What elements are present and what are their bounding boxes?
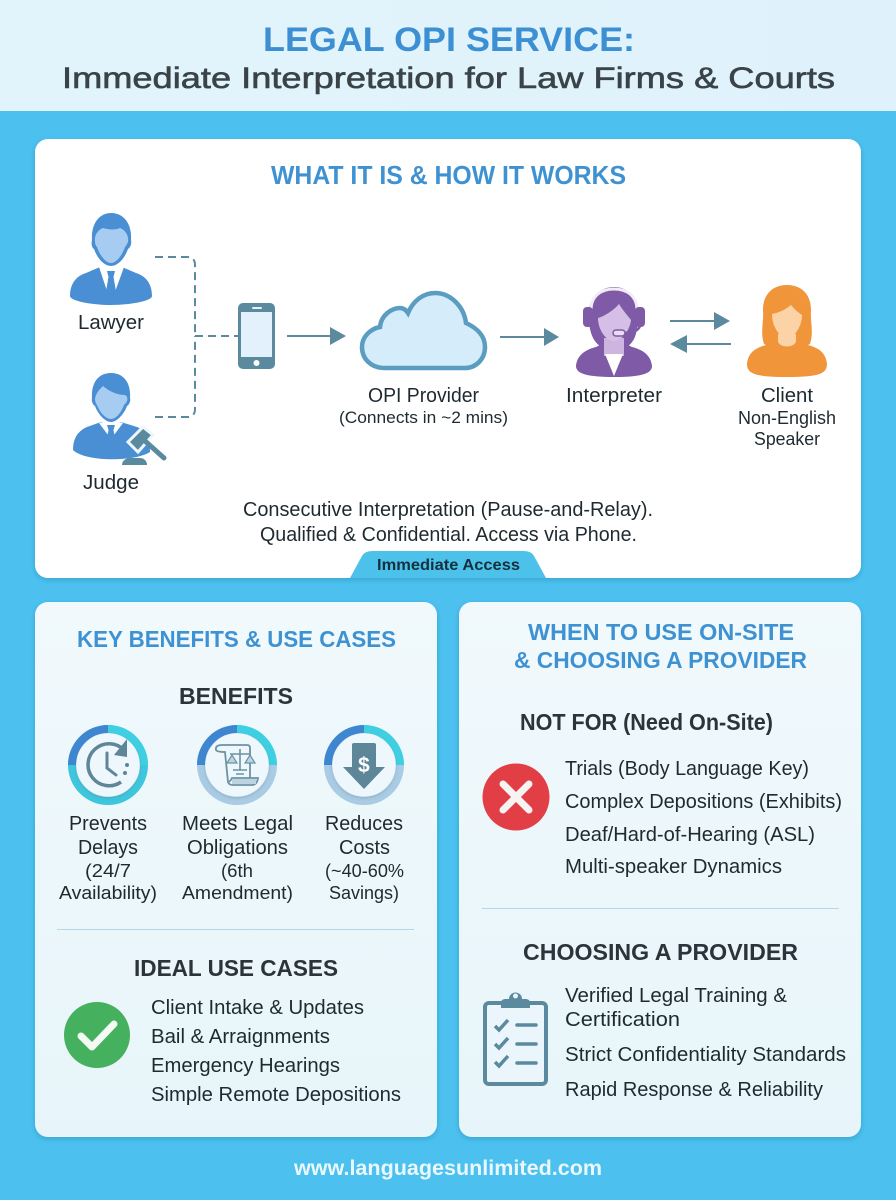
icon: cloud	[362, 293, 485, 368]
heading: what it is: WHAT IT IS & HOW IT WORKS	[271, 160, 626, 190]
label: interpreter: Interpreter	[566, 385, 662, 407]
icon: clipboard	[485, 992, 546, 1084]
text: reduces costs: (~40-60%	[325, 861, 404, 881]
text: meets legal obligations: Obligations	[187, 837, 288, 859]
panel: what it is and how it works	[35, 139, 861, 578]
icon: lawyer	[70, 213, 152, 305]
panel: when to use on-site and choosing a provider	[459, 602, 861, 1137]
icon: green check	[64, 1002, 130, 1068]
icon: cost reduction: $	[358, 754, 370, 777]
icon: judge with gavel	[73, 373, 164, 465]
text: description line 1: Consecutive Interpretation (Pause-and-Relay).	[243, 499, 653, 521]
header band	[0, 0, 896, 111]
list: ideal use cases: Simple Remote Depositions	[151, 1084, 401, 1106]
dashed connector	[155, 257, 238, 417]
subtitle: Immediate Interpretation for Law Firms & Courts	[62, 62, 835, 95]
icon: cost reduction	[328, 729, 400, 801]
subheading: ideal use cases: IDEAL USE CASES	[134, 955, 338, 981]
label: judge: Judge	[83, 472, 139, 494]
footer url: www.languagesunlimited.com	[293, 1157, 602, 1180]
list: choosing a provider	[565, 985, 846, 1101]
list: ideal use cases: Emergency Hearings	[151, 1055, 340, 1077]
label: client: Client	[761, 385, 813, 407]
text: prevents delays: Delays	[78, 837, 138, 859]
text: prevents delays: (24/7	[85, 861, 131, 881]
arrow: from client	[670, 335, 731, 353]
title: LEGAL OPI SERVICE:	[263, 21, 635, 59]
tab: immediate access: Immediate Access	[377, 557, 520, 574]
text: meets legal obligations: (6th	[221, 861, 253, 881]
icon: phone	[238, 303, 275, 369]
label: connects time: (Connects in ~2 mins)	[339, 408, 508, 427]
text: reduces costs: Reduces	[325, 813, 403, 835]
subheading: not for: NOT FOR (Need On-Site)	[520, 709, 773, 735]
arrow: phone to cloud	[287, 327, 346, 345]
label: OPI provider: OPI Provider	[368, 385, 479, 407]
heading: when to use on-site	[514, 619, 807, 673]
text: meets legal obligations: Amendment)	[182, 883, 293, 903]
text: meets legal obligations: Meets Legal	[182, 813, 293, 835]
icon: legal scroll	[201, 729, 273, 801]
label: non-english: Non-English	[738, 408, 836, 428]
label: speaker: Speaker	[754, 429, 820, 449]
icon: interpreter	[576, 287, 652, 377]
list: ideal use cases	[151, 997, 401, 1106]
text: description line 2: Qualified & Confidential. Access via Phone.	[260, 524, 637, 546]
icon: clock	[72, 729, 144, 801]
list: choosing a provider: Rapid Response & Reliability	[565, 1079, 823, 1101]
heading: when to use on-site: WHEN TO USE ON-SITE	[528, 619, 794, 645]
arrow: cloud to interpreter	[500, 328, 559, 346]
tab: immediate access	[350, 551, 546, 578]
text: prevents delays: Availability)	[59, 883, 157, 903]
list: choosing a provider: Verified Legal Training &	[565, 985, 788, 1007]
text: prevents delays: Prevents	[69, 813, 147, 835]
text: meets legal obligations	[182, 813, 293, 903]
heading: key benefits: KEY BENEFITS & USE CASES	[77, 626, 396, 652]
text: reduces costs: Savings)	[329, 883, 399, 903]
panel: key benefits and use cases	[35, 602, 437, 1137]
list: choosing a provider: Certification	[565, 1009, 680, 1031]
subheading: benefits: BENEFITS	[179, 683, 293, 709]
text: reduces costs: Costs	[339, 837, 390, 859]
list: not for	[565, 758, 842, 878]
arrow: to client	[670, 312, 730, 330]
list: not for: Trials (Body Language Key)	[565, 758, 809, 780]
icon: client	[747, 285, 827, 377]
text: reduces costs	[325, 813, 404, 903]
list: ideal use cases: Bail & Arraignments	[151, 1026, 330, 1048]
subheading: choosing a provider: CHOOSING A PROVIDER	[523, 939, 798, 965]
text: prevents delays	[59, 813, 157, 903]
list: not for: Multi-speaker Dynamics	[565, 856, 782, 878]
label: lawyer: Lawyer	[78, 312, 144, 334]
list: not for: Deaf/Hard-of-Hearing (ASL)	[565, 824, 815, 846]
list: not for: Complex Depositions (Exhibits)	[565, 791, 842, 813]
heading: when to use on-site: & CHOOSING A PROVIDER	[514, 647, 807, 673]
icon: red cross	[482, 764, 550, 830]
list: choosing a provider: Strict Confidentiality Standards	[565, 1044, 846, 1066]
list: ideal use cases: Client Intake & Updates	[151, 997, 364, 1019]
